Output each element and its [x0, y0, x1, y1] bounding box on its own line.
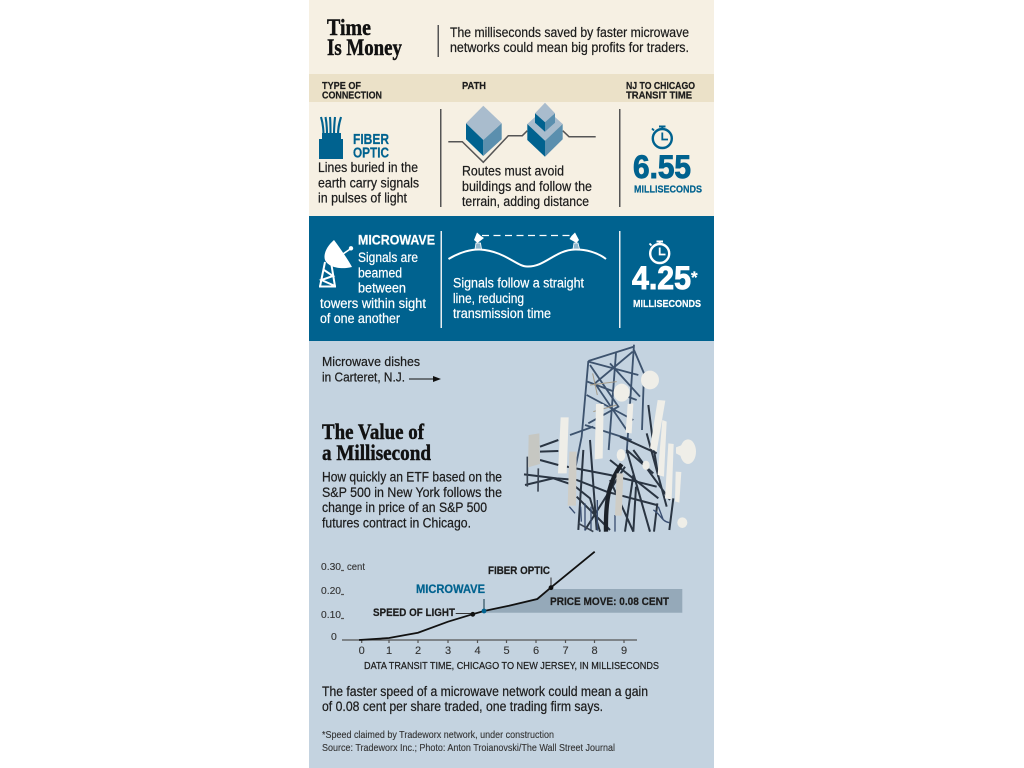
x axis labels: 8	[591, 645, 598, 657]
path description: transmission time	[453, 306, 551, 321]
path description	[453, 276, 584, 321]
photo caption: Microwave dishes	[322, 354, 420, 369]
footnote and source	[322, 729, 615, 754]
x axis labels: 3	[445, 645, 451, 657]
y axis labels: cent	[347, 561, 365, 573]
lower lattice	[524, 405, 673, 532]
fiber optic heading: OPTIC	[353, 144, 389, 162]
description	[322, 470, 502, 530]
panel: column headers: TYPE OF	[322, 80, 361, 92]
shaded price move	[484, 589, 682, 613]
icon: stopwatch	[650, 242, 669, 263]
x axis labels	[359, 645, 627, 657]
y axis labels: 0.20	[321, 585, 341, 597]
panel: fiber optic row	[309, 102, 714, 216]
x axis labels: 0	[359, 645, 365, 657]
subtitle	[450, 25, 689, 55]
photo caption: in Carteret, N.J.	[322, 370, 405, 384]
panel: column headers: CONNECTION	[322, 90, 382, 102]
transit time fiber	[633, 149, 702, 196]
icon: stopwatch	[652, 126, 672, 148]
path description: terrain, adding distance	[462, 194, 589, 209]
panel: column headers: TRANSIT TIME	[626, 90, 692, 102]
photo: microwave tower	[524, 345, 696, 532]
x axis labels: 2	[415, 645, 421, 657]
transit time microwave	[632, 260, 701, 310]
arrow	[409, 376, 441, 382]
leader lines	[456, 578, 551, 614]
y axis labels: 0	[331, 631, 337, 643]
microwave heading: MICROWAVE	[358, 232, 435, 248]
transit time microwave: *	[691, 268, 698, 287]
conclusion	[322, 684, 648, 714]
title: Is Money	[327, 35, 402, 60]
transit time microwave: 4.25	[632, 260, 691, 296]
heading: The Value of	[322, 419, 425, 444]
fiber optic heading	[353, 131, 389, 162]
transit time microwave: MILLISECONDS	[633, 298, 701, 310]
description: futures contract in Chicago.	[322, 516, 471, 530]
heading	[322, 419, 431, 465]
microwave description: between	[358, 280, 406, 296]
y axis labels: 0.30	[321, 561, 341, 573]
x axis labels: 5	[503, 645, 510, 657]
antenna panels	[528, 371, 696, 528]
x axis labels: 7	[562, 645, 569, 657]
photo caption	[322, 354, 420, 384]
x axis labels: 6	[533, 645, 539, 657]
x axis labels: 1	[386, 645, 392, 657]
line chart	[321, 552, 682, 672]
path description: line, reducing	[453, 291, 524, 306]
upper lattice	[570, 345, 644, 468]
icon: line of sight path	[448, 232, 606, 267]
footnote and source: *Speed claimed by Tradeworx network, under construction	[322, 729, 554, 741]
curve	[359, 552, 595, 640]
fiber optic description: in pulses of light	[318, 190, 407, 206]
description: How quickly an ETF based on the	[322, 470, 502, 484]
subtitle: The milliseconds saved by faster microwave	[450, 25, 689, 40]
path description: Routes must avoid	[462, 164, 564, 178]
path description: buildings and follow the	[462, 179, 592, 194]
description: change in price of an S&P 500	[322, 500, 487, 515]
transit time fiber: MILLISECONDS	[634, 184, 702, 196]
title: Time	[327, 15, 371, 40]
conclusion: of 0.08 cent per share traded, one trading firm says.	[322, 699, 603, 714]
panel: value of a millisecond	[309, 341, 714, 768]
panel: column headers: NJ TO CHICAGO	[626, 80, 695, 92]
path description: Signals follow a straight	[453, 276, 584, 290]
y axis labels	[321, 561, 365, 643]
microwave description: Signals are	[358, 250, 418, 265]
fiber optic description: Lines buried in the	[318, 160, 418, 175]
heading: a Millisecond	[322, 440, 431, 465]
chart annotations: FIBER OPTIC	[488, 565, 550, 577]
fiber optic heading: FIBER	[353, 131, 389, 148]
fiber optic description: earth carry signals	[318, 176, 419, 190]
panel: header	[309, 0, 714, 74]
chart annotations	[373, 565, 669, 619]
panel: column headers	[309, 74, 714, 102]
microwave description: beamed	[358, 266, 402, 280]
chart annotations: SPEED OF LIGHT	[373, 607, 455, 619]
subtitle: networks could mean big profits for traders.	[450, 40, 689, 55]
panel: microwave row	[309, 216, 714, 341]
icon: buildings and fiber path	[448, 103, 596, 162]
icon: fiber optic cable	[319, 117, 343, 159]
y axis labels: 0.10	[321, 609, 341, 621]
footnote and source: Source: Tradeworx Inc.; Photo: Anton Troianovski/The Wall Street Journal	[322, 742, 615, 754]
x axis title: DATA TRANSIT TIME, CHICAGO TO NEW JERSEY, IN MILLISECONDS	[364, 660, 659, 672]
transit time fiber: 6.55	[633, 149, 691, 185]
icon: microwave dish tower	[319, 240, 353, 286]
fiber optic description	[318, 160, 419, 206]
x axis labels: 4	[474, 645, 481, 657]
axes	[341, 570, 637, 643]
chart annotations: PRICE MOVE: 0.08 CENT	[550, 596, 669, 608]
chart annotations: MICROWAVE	[416, 582, 485, 596]
panel: column headers: PATH	[462, 80, 486, 92]
microwave description: towers within sight	[320, 296, 426, 311]
path description	[462, 164, 592, 209]
description: S&P 500 in New York follows the	[322, 485, 502, 500]
conclusion: The faster speed of a microwave network could mean a gain	[322, 684, 648, 699]
microwave description	[320, 250, 426, 326]
x axis labels: 9	[621, 645, 627, 657]
microwave description: of one another	[320, 311, 400, 326]
title	[327, 15, 402, 60]
data points	[470, 585, 553, 617]
